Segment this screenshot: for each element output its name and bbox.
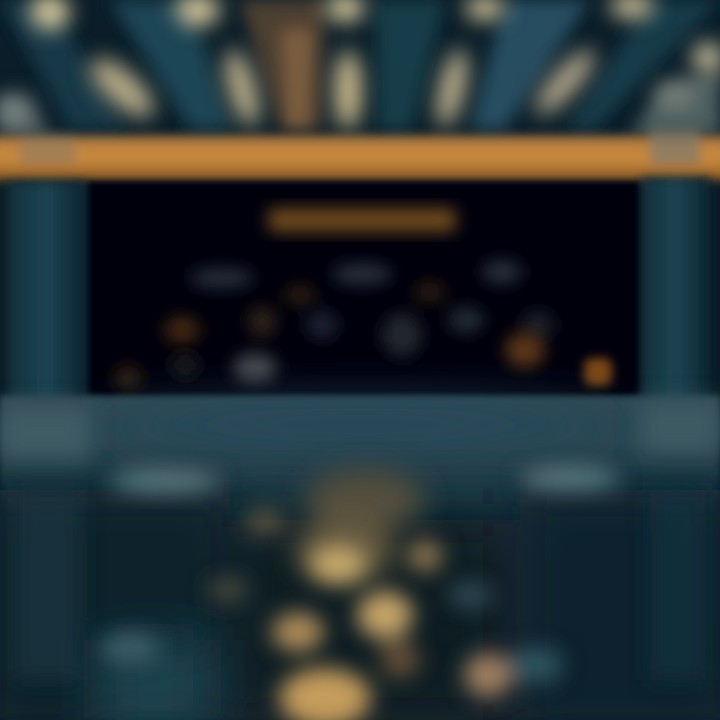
orange crossbeam bbox=[0, 128, 720, 180]
ceiling background bbox=[0, 0, 720, 140]
floor shading bbox=[0, 405, 720, 720]
floor glow bands bbox=[110, 466, 620, 493]
left pillar bbox=[8, 182, 86, 407]
floor pillar reflections bbox=[0, 400, 720, 680]
orange panel marker bbox=[584, 358, 612, 386]
ceiling radiating stripes bbox=[0, 0, 720, 135]
panel heading bbox=[268, 208, 456, 232]
ceiling lights bbox=[0, 0, 720, 130]
reflective floor bbox=[0, 396, 720, 720]
panel content row one bbox=[190, 260, 522, 288]
right pillar bbox=[642, 178, 710, 403]
panel content row three bbox=[114, 332, 545, 390]
golden floor reflections bbox=[100, 470, 563, 720]
panel content row two bbox=[164, 282, 554, 357]
central dark panel bbox=[88, 182, 640, 396]
